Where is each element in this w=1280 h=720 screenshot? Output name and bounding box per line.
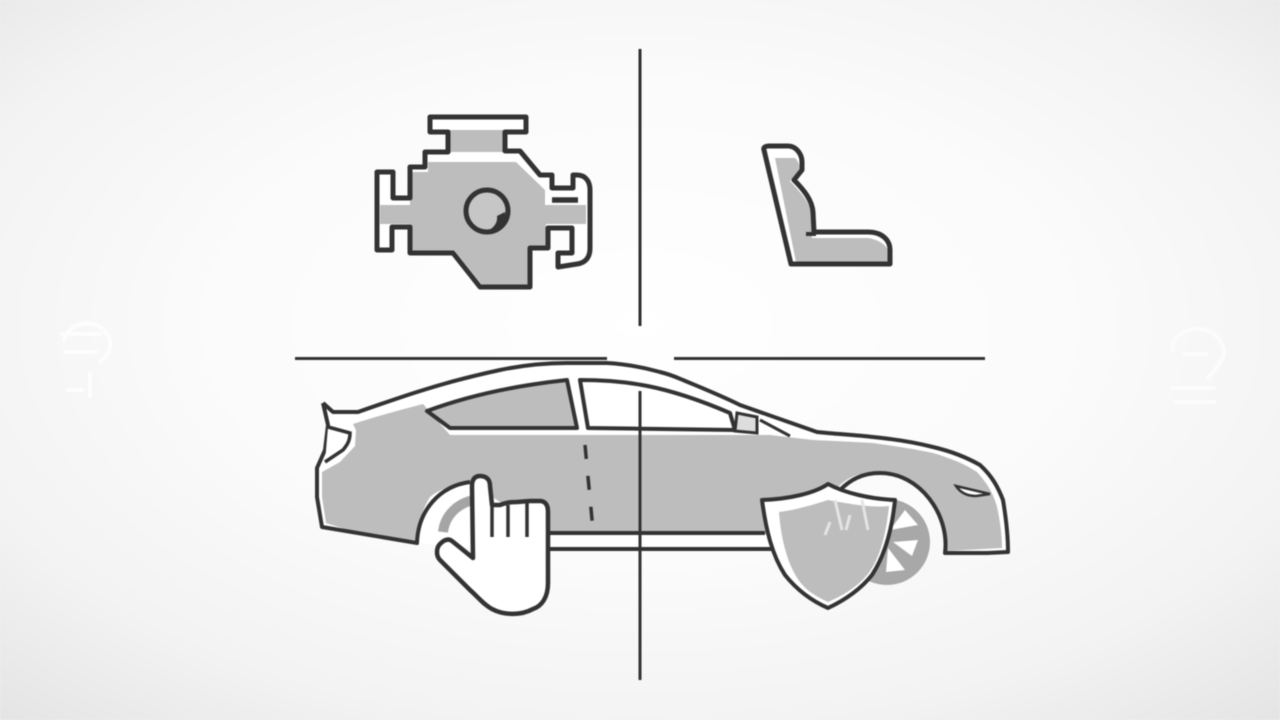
quadrant divider: top vertical line (638, 49, 642, 326)
quadrant divider: bottom vertical line (638, 391, 642, 680)
car: tail light (325, 427, 350, 462)
car: mirror (735, 413, 757, 433)
quadrant divider: right horizontal line (674, 357, 985, 360)
car: body panel fill (322, 404, 1002, 551)
icon: faint lightbulb right (1172, 329, 1224, 402)
icon: engine (377, 117, 590, 287)
car: front window (580, 380, 735, 430)
car: rear wheel (443, 500, 474, 532)
icon: faint lightbulb left (62, 323, 110, 396)
car: sill lines (548, 533, 785, 549)
icon: shield (762, 484, 895, 608)
car: rear outline (317, 403, 470, 543)
car: door line (585, 445, 593, 530)
car: body silhouette (317, 363, 1008, 553)
icon: car seat (764, 146, 890, 264)
icon: pointing hand (437, 476, 548, 614)
illustration: car (317, 363, 1008, 585)
car: headlight (956, 486, 990, 496)
car: outline top and hood (323, 363, 1008, 553)
quadrant divider: left horizontal line (295, 357, 607, 360)
car: front wheel (844, 499, 930, 585)
car: windshield base (760, 420, 790, 436)
car: rear window (427, 380, 577, 428)
